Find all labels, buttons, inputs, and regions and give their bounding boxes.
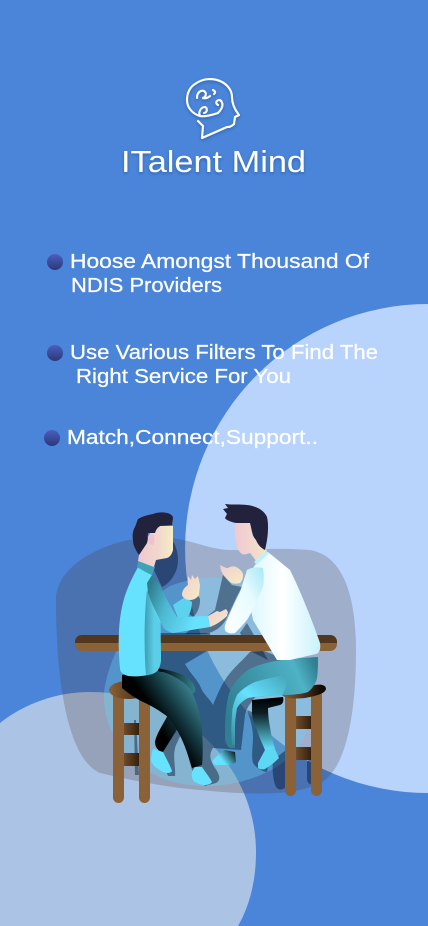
right man xyxy=(213,504,320,769)
translucent backdrop blob xyxy=(56,537,356,794)
far shoe xyxy=(258,749,279,769)
leg highlight xyxy=(231,675,286,745)
logo wordmark: ITalent Mind xyxy=(121,144,306,179)
bullet item 2 xyxy=(47,342,378,388)
collar xyxy=(137,561,155,575)
shadows of the figures xyxy=(134,540,313,790)
left stool xyxy=(109,681,150,803)
large light blue circle xyxy=(185,304,428,793)
hair xyxy=(133,512,173,555)
right stool xyxy=(282,685,326,796)
far leg xyxy=(155,715,178,752)
table xyxy=(75,635,337,651)
far leg xyxy=(252,697,283,750)
shirt torso xyxy=(245,552,320,660)
collar xyxy=(254,551,269,565)
torso side panel xyxy=(145,590,161,675)
far hand xyxy=(182,575,200,600)
bullet item 3: Match,Connect,Support.. xyxy=(67,427,318,449)
neck and face xyxy=(138,526,173,567)
inner cyan blob xyxy=(104,578,312,786)
arm xyxy=(147,575,210,633)
bullet item 2: Use Various Filters To Find The xyxy=(70,342,378,364)
shirt arm xyxy=(225,567,264,633)
neck and face xyxy=(235,523,267,562)
near leg xyxy=(122,671,203,768)
left man xyxy=(119,512,228,785)
hand xyxy=(220,565,243,584)
near shoe xyxy=(213,750,236,765)
far shoe xyxy=(151,749,172,773)
thigh back xyxy=(157,668,195,696)
near shoe xyxy=(192,767,212,785)
bullet item 1: Hoose Amongst Thousand Of xyxy=(70,251,370,273)
near leg xyxy=(225,657,318,748)
bullet item 1: NDIS Providers xyxy=(71,275,222,297)
far arm xyxy=(173,597,192,618)
icon: head with brain xyxy=(187,79,239,138)
hair xyxy=(223,504,268,550)
bottom left pale circle xyxy=(0,692,256,926)
bullet item 1 xyxy=(47,251,370,297)
bullet item 2: Right Service For You xyxy=(76,366,291,388)
ear xyxy=(148,534,154,545)
near hand xyxy=(208,609,228,627)
bullet list xyxy=(44,251,378,449)
torso xyxy=(119,567,161,676)
logo xyxy=(121,79,306,179)
illustration: two people talking at a table xyxy=(56,504,356,803)
